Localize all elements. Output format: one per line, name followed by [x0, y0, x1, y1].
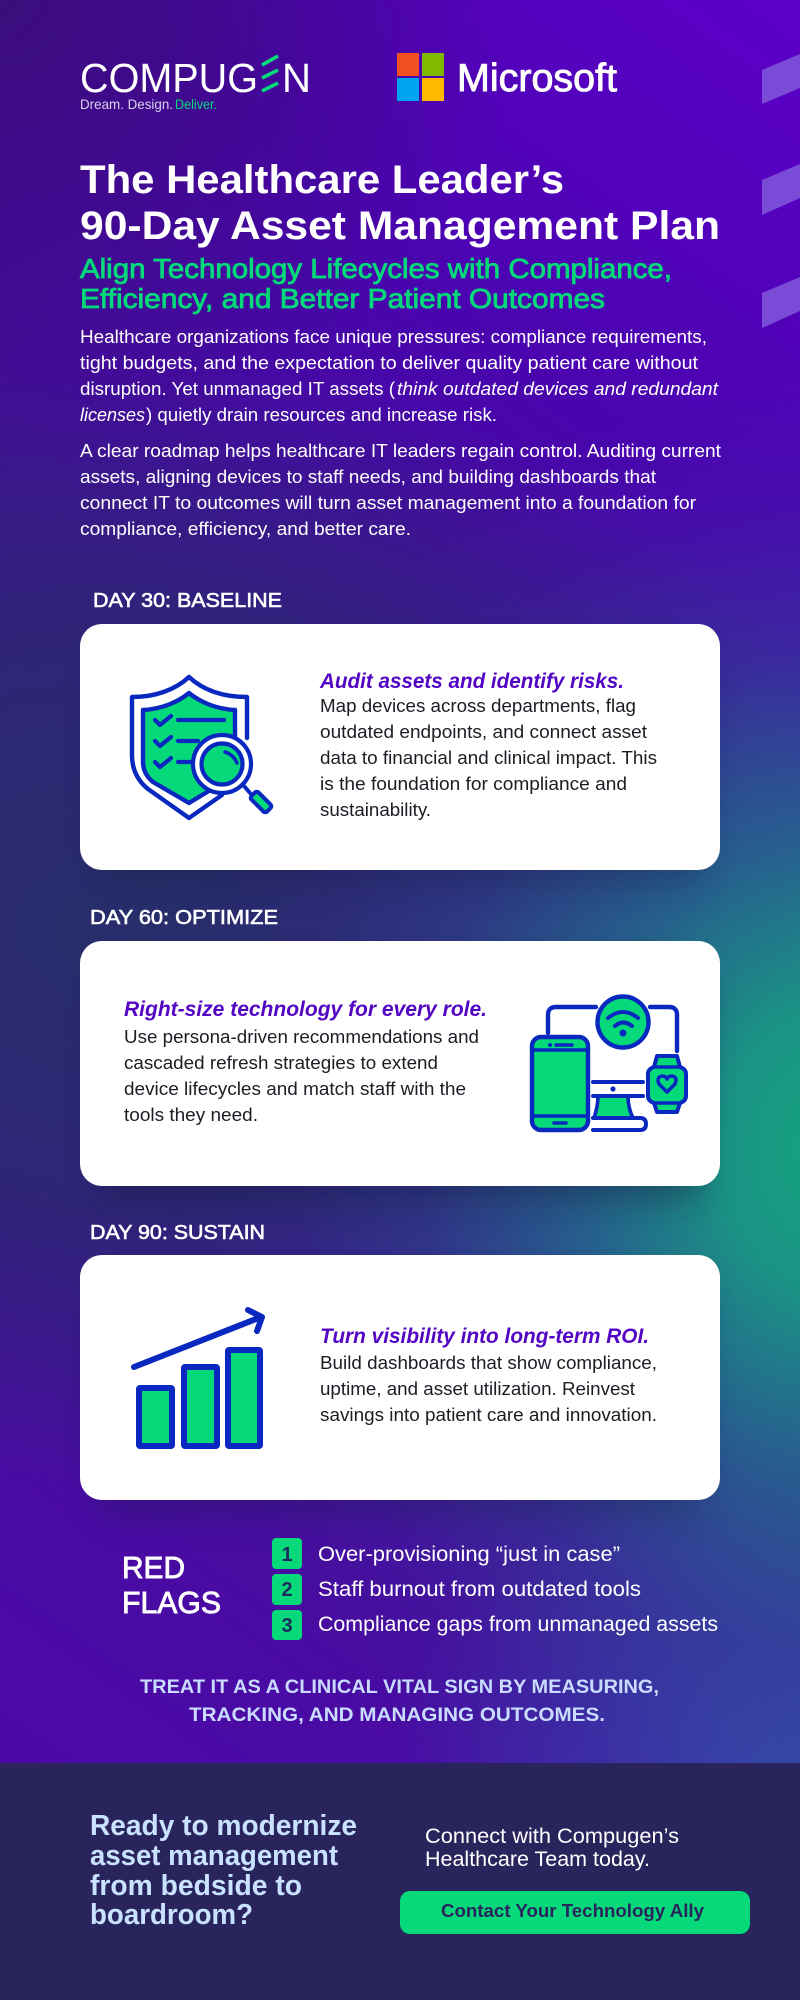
text block: right-size technology: Use persona-driven recommendations and [124, 1026, 479, 1047]
logo: Microsoft: Microsoft [457, 57, 617, 100]
heading: red flags [122, 1550, 221, 1620]
heading: ready to modernize [90, 1810, 357, 1931]
icon: shield with checklist and magnifier [132, 677, 272, 818]
text block: audit assets [319, 670, 657, 820]
intro paragraph 1: ) quietly drain resources and increase risk. [146, 404, 497, 425]
text block: right-size technology: Right-size technology for every role. [124, 998, 487, 1021]
button: contact: Contact Your Technology Ally [441, 1900, 705, 1921]
intro paragraph 2: A clear roadmap helps healthcare IT leaders regain control. Auditing current [80, 440, 721, 461]
panel: day 30 card [80, 624, 720, 870]
panel: red flags [122, 1538, 718, 1640]
flag 3: 3 [281, 1615, 293, 1637]
logo: Compugen: N [282, 55, 311, 101]
heading: ready to modernize: asset management [90, 1840, 338, 1872]
heading: ready to modernize: from bedside to [90, 1870, 302, 1902]
intro paragraph 1: think outdated devices and redundant [397, 378, 719, 399]
title: The Healthcare Leader’s [80, 158, 564, 202]
logo: Compugen: COMPUG [80, 55, 258, 101]
text block: right-size technology [124, 998, 487, 1125]
intro paragraph 2: connect IT to outcomes will turn asset management into a foundation for [80, 492, 696, 513]
flag 3: Compliance gaps from unmanaged assets [318, 1613, 718, 1636]
text block: connect: Connect with Compugen’s [425, 1824, 679, 1848]
heading: day 30: DAY 30: BASELINE [93, 590, 282, 612]
text block: right-size technology: device lifecycles and match staff with the [124, 1078, 466, 1099]
title [80, 158, 720, 248]
text block: connect: Healthcare Team today. [425, 1847, 650, 1871]
decorative stripes [762, 54, 800, 328]
heading: red flags: FLAGS [122, 1585, 221, 1620]
logo: Compugen: Dream. Design. [80, 96, 173, 112]
text block: turn visibility into ROI: uptime, and asset utilization. Reinvest [320, 1378, 635, 1399]
panel: footer call to action [0, 1763, 800, 2000]
title: 90-Day Asset Management Plan [80, 204, 720, 248]
callout: clinical vital sign: TREAT IT AS A CLINICAL VITAL SIGN BY MEASURING, [140, 1676, 659, 1698]
text block: audit assets: Map devices across departments, flag [320, 695, 636, 716]
callout: clinical vital sign [140, 1676, 659, 1726]
logo: Compugen [80, 55, 311, 112]
text block: right-size technology: tools they need. [124, 1104, 258, 1125]
text block: audit assets: data to financial and clinical impact. This [320, 747, 657, 768]
subtitle [80, 253, 672, 314]
intro paragraph 1: Healthcare organizations face unique pressures: compliance requirements, [80, 326, 707, 347]
icon: connected devices [532, 996, 686, 1130]
intro paragraph 1: tight budgets, and the expectation to deliver quality patient care without [80, 352, 698, 373]
logo: Compugen: Deliver. [175, 96, 217, 112]
text block: turn visibility into ROI [320, 1325, 657, 1425]
text block: right-size technology: cascaded refresh strategies to extend [124, 1052, 438, 1073]
text block: turn visibility into ROI: savings into patient care and innovation. [320, 1404, 657, 1425]
flag 2: 2 [281, 1579, 293, 1601]
intro paragraph 1: licenses [80, 404, 145, 425]
heading: day 90: DAY 90: SUSTAIN [90, 1222, 265, 1244]
flag 1: 1 [281, 1544, 293, 1566]
callout: clinical vital sign: TRACKING, AND MANAGING OUTCOMES. [189, 1704, 605, 1726]
intro paragraph 2: assets, aligning devices to staff needs, and building dashboards that [80, 466, 656, 487]
heading: red flags: RED [122, 1550, 185, 1585]
flag 3 [272, 1610, 718, 1640]
flag 2 [272, 1574, 641, 1605]
text block: connect [425, 1824, 679, 1871]
flag 1: Over-provisioning “just in case” [318, 1543, 620, 1566]
flag 2: Staff burnout from outdated tools [318, 1578, 641, 1601]
intro paragraph 2 [80, 440, 721, 539]
flag 1 [272, 1538, 620, 1569]
logo: Microsoft [397, 53, 617, 101]
panel: day 90 card [80, 1255, 720, 1500]
text block: audit assets: outdated endpoints, and connect asset [320, 721, 647, 742]
button: contact [400, 1891, 750, 1934]
heading: ready to modernize: boardroom? [90, 1899, 253, 1931]
heading: ready to modernize: Ready to modernize [90, 1810, 357, 1842]
text block: turn visibility into ROI: Build dashboards that show compliance, [320, 1352, 657, 1373]
intro paragraph 1: disruption. Yet unmanaged IT assets ( [80, 378, 396, 399]
panel: day 60 card [80, 941, 720, 1186]
intro paragraph 2: compliance, efficiency, and better care. [80, 518, 411, 539]
subtitle: Align Technology Lifecycles with Compliance, [80, 253, 672, 284]
text block: audit assets: sustainability. [320, 799, 431, 820]
text block: audit assets: Audit assets and identify risks. [319, 670, 624, 693]
subtitle: Efficiency, and Better Patient Outcomes [80, 283, 605, 314]
icon: growth bar chart [134, 1310, 262, 1446]
intro paragraph 1 [80, 326, 719, 425]
heading: day 60: DAY 60: OPTIMIZE [90, 907, 278, 929]
text block: turn visibility into ROI: Turn visibility into long-term ROI. [320, 1325, 649, 1348]
text block: audit assets: is the foundation for compliance and [320, 773, 627, 794]
